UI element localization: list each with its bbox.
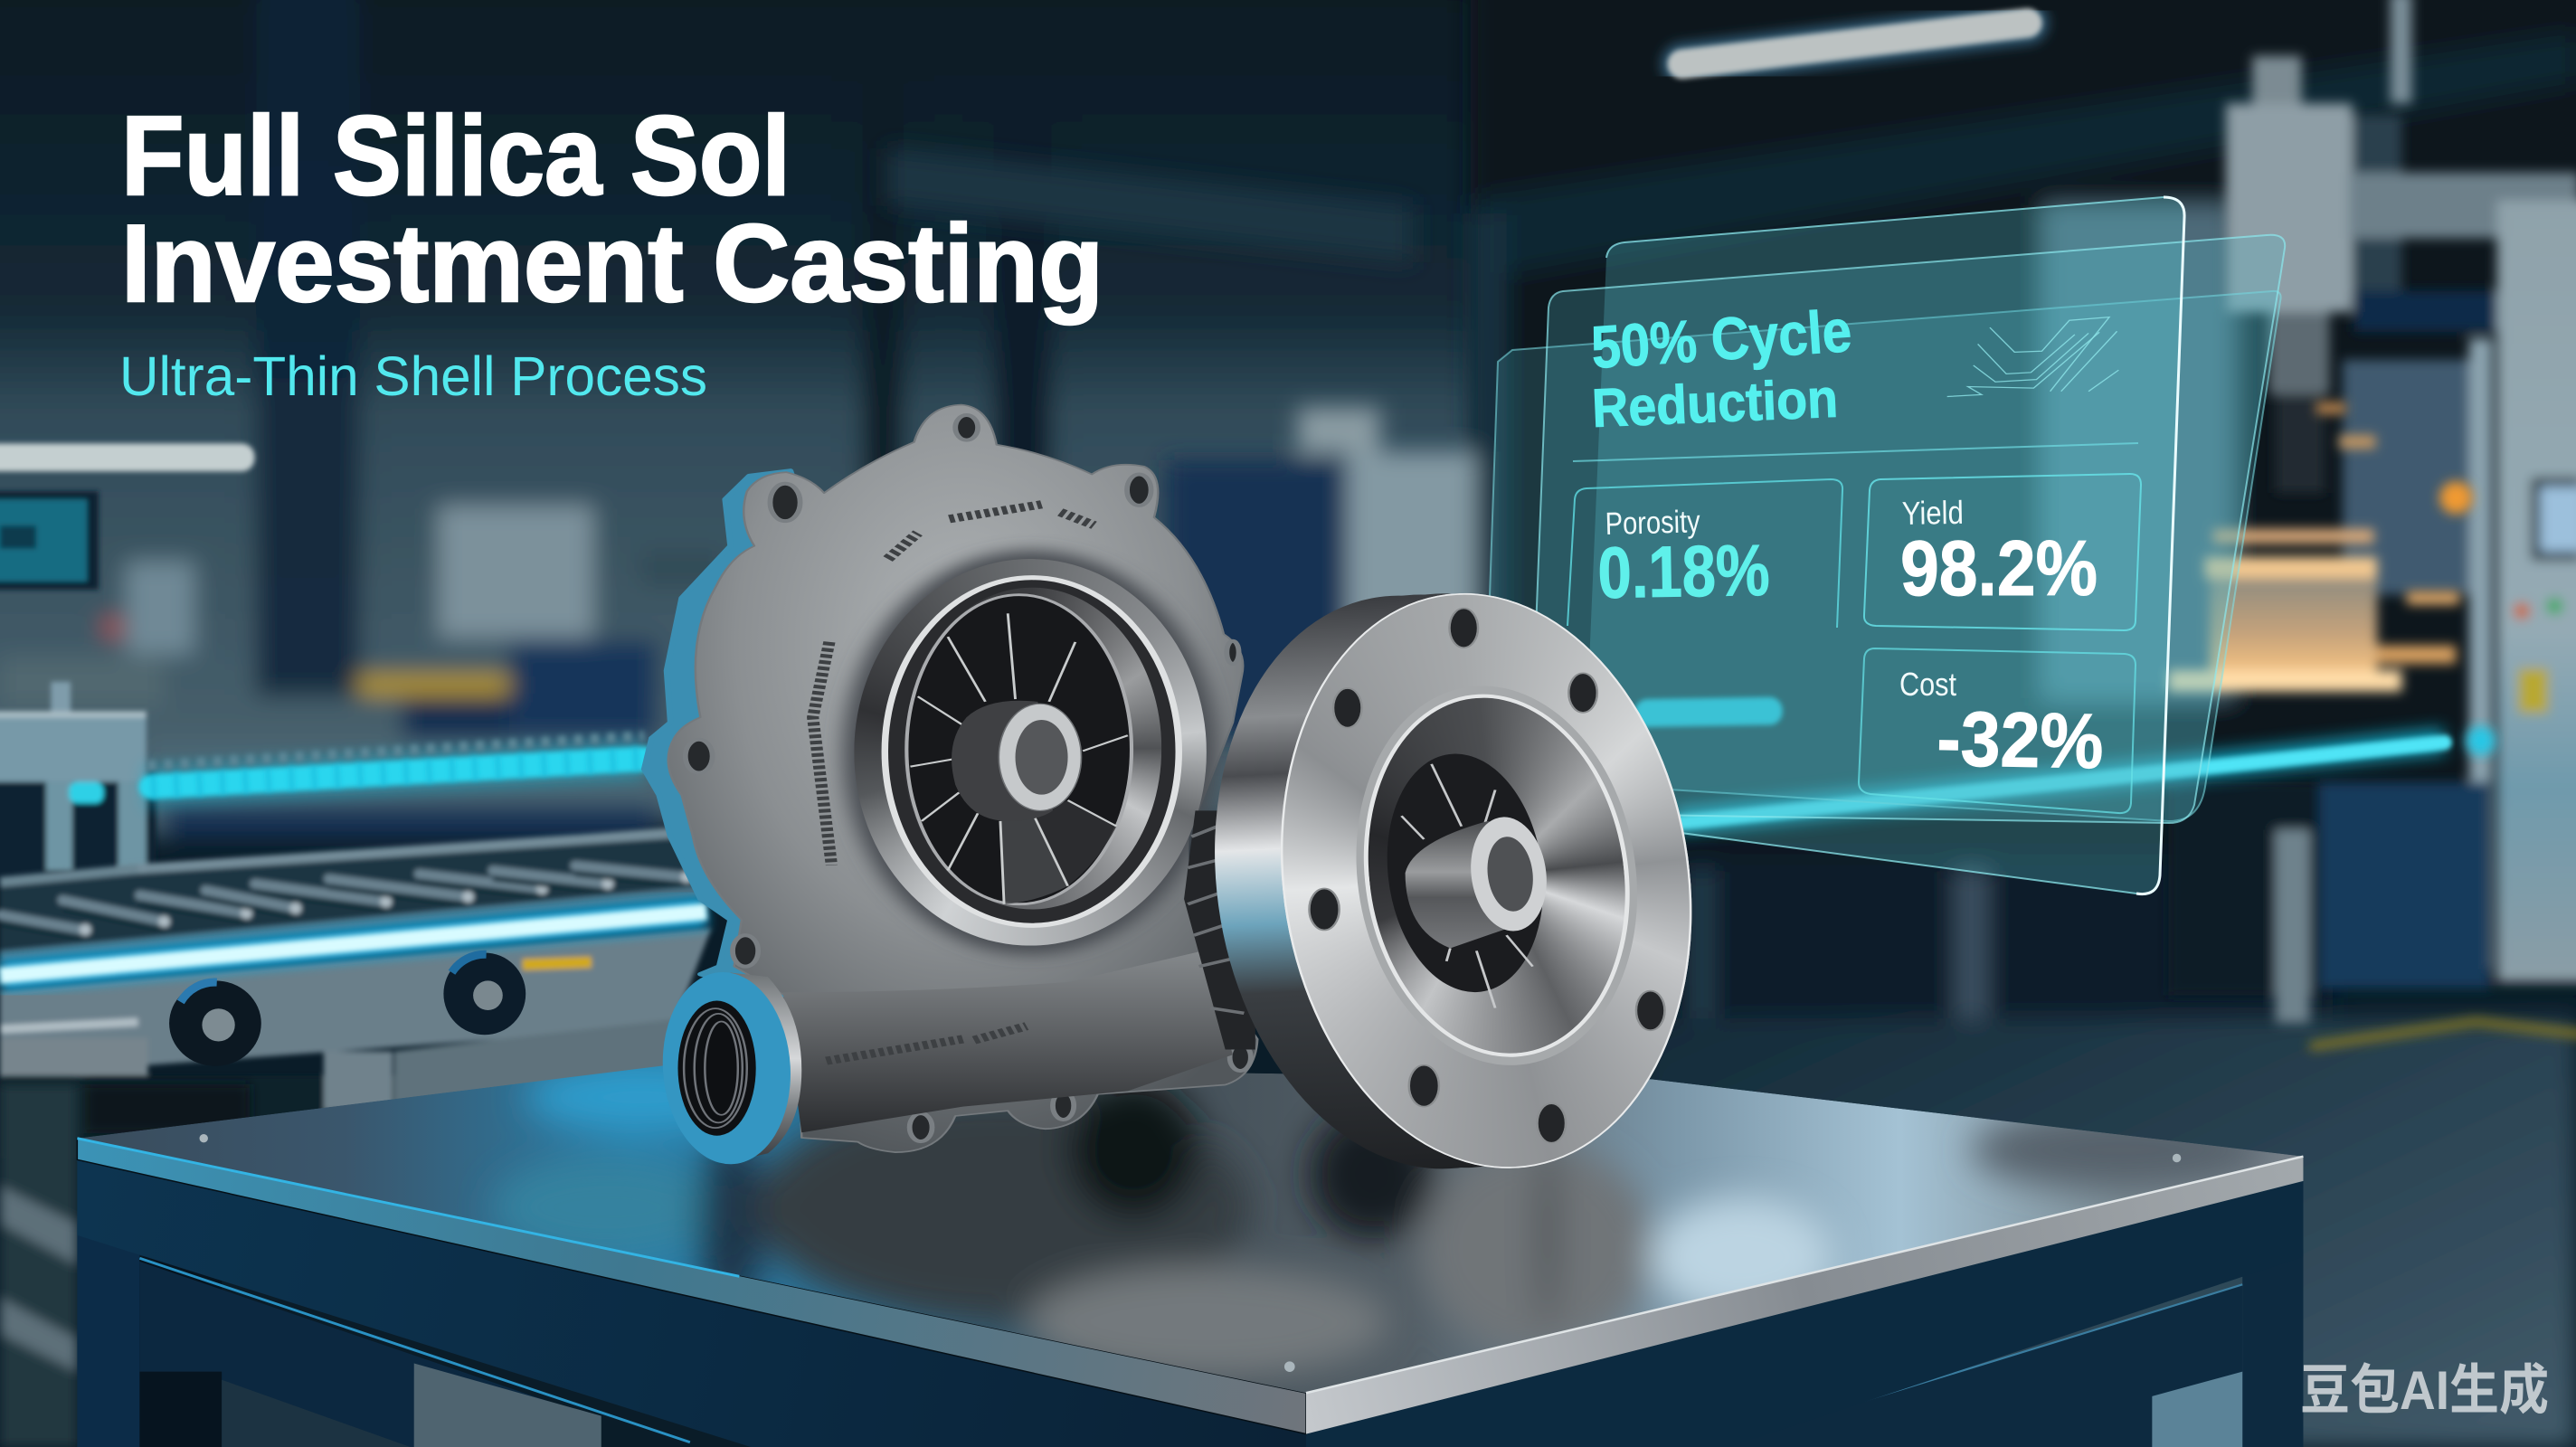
- table apron: [77, 1159, 1306, 1447]
- heading: 50% Cycle Reduction: Reduction: [1591, 368, 1839, 439]
- flange cavity blades: [1401, 764, 1533, 1008]
- table apron right: [1306, 1181, 2303, 1447]
- center-right factory background: [887, 0, 2576, 1447]
- impeller housing recess shade: [843, 550, 1217, 955]
- bright machined ring: [885, 578, 1179, 925]
- card: porosity: 0.18%: [1597, 530, 1770, 613]
- card: yield: [1864, 474, 2141, 630]
- right furnace machine: [2169, 0, 2576, 1046]
- impeller blades: [910, 613, 1128, 904]
- housing body: [668, 405, 1257, 1152]
- back pane with bright edge: [1583, 197, 2184, 894]
- impeller hub ring: [999, 704, 1081, 810]
- table lip left: [77, 1139, 1306, 1434]
- embossed markings: [813, 505, 1094, 1061]
- icon: casting section lines: [1947, 317, 2118, 396]
- impeller hub bore: [1016, 720, 1068, 795]
- conveyor right cyan light: [1634, 697, 2496, 823]
- title: Investment Casting: [121, 202, 1103, 325]
- furnace glow: [2169, 402, 2473, 692]
- content pane: [1529, 235, 2285, 823]
- cast metal parts: [644, 405, 1719, 1178]
- flange face: [1254, 583, 1719, 1178]
- recess metal cone: [854, 559, 1207, 946]
- title: Full Silica Sol: [121, 94, 791, 219]
- ceiling pendant light right: [1682, 23, 2027, 64]
- heading: 50% Cycle Reduction: [1589, 297, 1853, 439]
- housing blue left edge: [644, 470, 813, 1003]
- conveyor wheels: [169, 952, 526, 1066]
- left conveyor machine block: [0, 682, 156, 887]
- flange cavity: [1376, 750, 1554, 996]
- monitor left: [0, 491, 99, 590]
- flange bright ring: [1347, 688, 1647, 1064]
- table front edge highlight: [1306, 1157, 2303, 1393]
- card: cost: -32%: [1937, 695, 2104, 785]
- bright conveyor light: [0, 912, 706, 976]
- table reflections: [493, 1064, 2267, 1378]
- watermark: 豆包AI生成: [2300, 1360, 2549, 1421]
- card: porosity: [1567, 479, 1842, 628]
- housing bolt lugs: [686, 415, 1251, 1141]
- table legs and lower frame: [77, 1224, 2303, 1447]
- table screws: [199, 1134, 2181, 1372]
- subtitle: Ultra-Thin Shell Process: [119, 345, 707, 407]
- housing outlet tube: [783, 950, 1233, 1132]
- blade fill facets: [1000, 800, 1116, 904]
- ribs behind flange: [1184, 810, 1255, 1049]
- impeller hub body: [952, 701, 1053, 821]
- flange inner cone: [1351, 692, 1642, 1059]
- flange hub bore: [1484, 836, 1537, 913]
- lower-left background: [0, 1084, 250, 1447]
- beaded cyan light strip: [145, 736, 644, 787]
- flange hub body: [1406, 821, 1533, 949]
- impeller cavity: [906, 595, 1132, 904]
- flange rim: [1188, 584, 1698, 1178]
- card: yield: Yield: [1901, 494, 1964, 532]
- card: cost: [1859, 648, 2136, 813]
- roller conveyor: [0, 825, 711, 1158]
- flange bolt holes: [1309, 609, 1664, 1143]
- pane top and bottom edge lines: [1606, 197, 2164, 894]
- metal table: [77, 1064, 2303, 1447]
- glass panel stack: [1483, 197, 2285, 894]
- back pane low: [1483, 291, 2281, 821]
- card: cost: Cost: [1899, 666, 1956, 703]
- flange stepped ring: [1339, 679, 1655, 1072]
- heading: 50% Cycle Reduction: 50% Cycle: [1589, 297, 1853, 381]
- ceiling light left: [0, 443, 255, 471]
- left factory wall and columns: [0, 0, 1479, 837]
- table left edge highlight: [77, 1139, 739, 1276]
- card: porosity: Porosity: [1605, 504, 1701, 542]
- table lip right: [1306, 1157, 2303, 1434]
- panel divider: [1573, 443, 2138, 461]
- flange hub ring: [1465, 815, 1552, 932]
- inlet flange: [658, 970, 801, 1166]
- table top surface: [77, 1064, 2303, 1393]
- bright right pane edge: [2136, 197, 2184, 894]
- card: yield: 98.2%: [1900, 525, 2098, 612]
- inner conical surface: [903, 588, 1161, 909]
- title: [121, 94, 1103, 325]
